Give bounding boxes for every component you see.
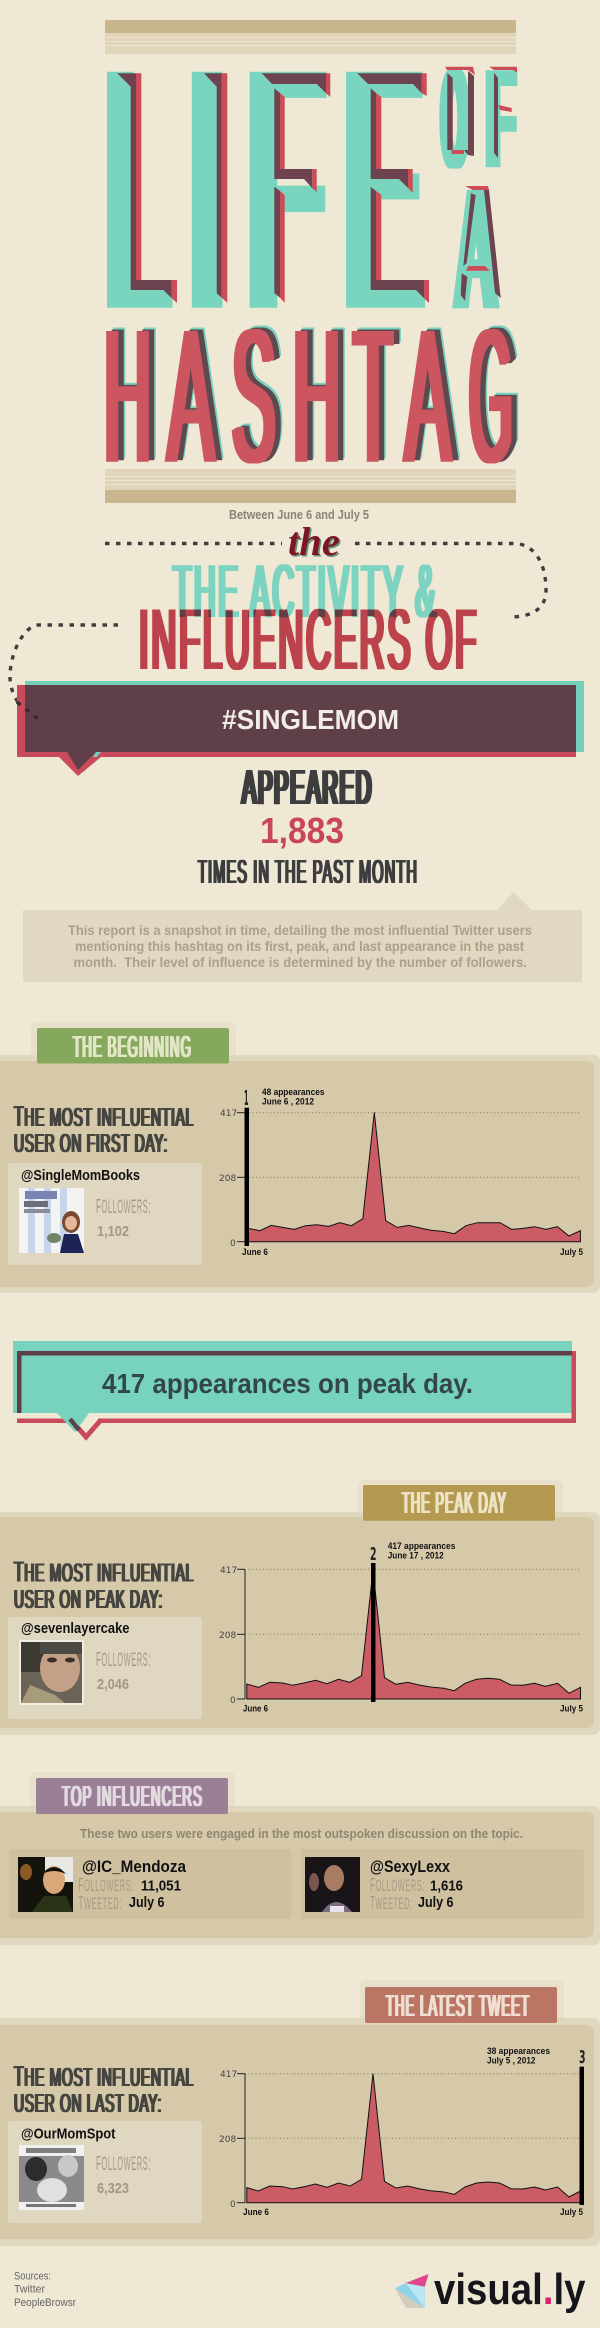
chart: first day marker: 417 xyxy=(220,1109,237,1119)
word: OF: O xyxy=(442,39,467,197)
chart: first day marker: July 5 xyxy=(560,1247,583,1257)
user card: 2,046 xyxy=(97,1676,129,1693)
word: HASHTAG: S xyxy=(232,291,275,503)
user card: @SingleMomBooks xyxy=(21,1167,140,1184)
user card: 6,323 xyxy=(97,2180,129,2197)
panel background xyxy=(0,1022,600,1293)
tab: top influencers: TOP INFLUENCERS xyxy=(62,1781,203,1813)
chart: last day marker: July 5 , 2012 xyxy=(487,2055,536,2065)
title: life of a hashtag xyxy=(104,0,517,503)
chart: first day marker: 48 appearances xyxy=(262,1087,324,1097)
heading: most influential user on peak day: THE MOST INFLUENTIAL xyxy=(14,1557,194,1589)
influencer card: IC_Mendoza: TWEETED: xyxy=(78,1892,122,1913)
heading: most influential user on peak day xyxy=(14,1557,194,1614)
sources: PeopleBrowsr xyxy=(14,2297,76,2309)
callout text: 417 appearances on peak day. xyxy=(102,1368,473,1399)
user card xyxy=(8,1617,202,1719)
chart: first day marker xyxy=(219,1086,583,1257)
user card: FOLLOWERS: xyxy=(96,1195,151,1218)
user card: @OurMomSpot xyxy=(21,2125,116,2142)
chart: last day marker: July 5 xyxy=(560,2207,583,2217)
intro paragraph: mentioning this hashtag on its first, peak, and last appearance in the past xyxy=(75,938,524,954)
avatar: book cover xyxy=(19,1188,84,1253)
callout: peak day appearances xyxy=(13,1341,576,1437)
influencer card: SexyLexx: @SexyLexx xyxy=(370,1857,450,1876)
chart: peak day marker: 2 xyxy=(370,1544,376,1565)
word: HASHTAG: A xyxy=(405,291,450,503)
heading: most influential user on peak day: USER ON PEAK DAY: xyxy=(14,1584,163,1614)
word: HASHTAG: T xyxy=(353,291,392,503)
avatar: our mom spot logo xyxy=(19,2145,84,2210)
word: LIFE: F xyxy=(248,0,324,381)
dashed connector line xyxy=(10,544,546,719)
section: the peak day xyxy=(0,1480,600,1735)
word: the: the xyxy=(288,519,340,564)
chart: peak day marker: 417 xyxy=(220,1566,237,1576)
chart: last day marker: 3 xyxy=(579,2047,586,2068)
user card: FOLLOWERS: xyxy=(96,2152,151,2175)
chart: first day marker: 0 xyxy=(230,1239,236,1249)
chart: peak day marker: July 5 xyxy=(560,1704,583,1714)
chart: first day marker: June 6 , 2012 xyxy=(262,1097,314,1107)
influencer card: SexyLexx: July 6 xyxy=(418,1895,454,1911)
user card: FOLLOWERS: xyxy=(96,1648,151,1671)
bottom stripe band xyxy=(105,469,516,503)
avatar: man photo xyxy=(18,1857,73,1912)
user card: 1,102 xyxy=(97,1223,129,1240)
chart: first day marker: June 6 xyxy=(242,1247,268,1257)
text: APPEARED xyxy=(242,760,373,815)
chart: last day marker: 208 xyxy=(219,2135,236,2145)
title: life of a hashtag: E xyxy=(344,0,422,381)
heading: most influential user on first day: USER ON FIRST DAY: xyxy=(14,1128,168,1158)
chart: last day marker xyxy=(219,2046,586,2217)
influencer card: IC_Mendoza: July 6 xyxy=(129,1895,164,1911)
chart: first day marker: 1 xyxy=(244,1086,248,1110)
panel background xyxy=(0,1480,600,1735)
intro paragraph xyxy=(68,922,532,970)
intro text panel xyxy=(23,892,582,982)
sources xyxy=(14,2270,76,2309)
word: HASHTAG: A xyxy=(167,291,214,503)
user card: @sevenlayercake xyxy=(21,1620,130,1637)
text: F xyxy=(487,39,515,197)
user card xyxy=(8,1163,202,1265)
heading: most influential user on first day: THE MOST INFLUENTIAL xyxy=(14,1101,194,1133)
tab: top influencers xyxy=(36,1778,228,1814)
hashtag label: #SINGLEMOM xyxy=(222,704,399,735)
chart: first day marker: 208 xyxy=(219,1174,236,1184)
total count: 1,883 xyxy=(260,810,344,851)
icon: visual.ly gem xyxy=(395,2274,429,2308)
chart: peak day marker: June 17 , 2012 xyxy=(388,1551,444,1561)
date range: Between June 6 and July 5 xyxy=(229,508,369,522)
heading: most influential user on first day xyxy=(14,1101,194,1158)
intro paragraph: month. Their level of influence is determined by the number of followers. xyxy=(74,954,527,970)
logo: visual.ly: visual.ly xyxy=(434,2265,586,2314)
influencer card: IC_Mendoza: @IC_Mendoza xyxy=(82,1857,186,1876)
chart: last day marker: 0 xyxy=(230,2200,236,2210)
chart: peak day marker xyxy=(219,1541,583,1714)
influencer card: SexyLexx: TWEETED: xyxy=(370,1892,412,1913)
influencer card: IC_Mendoza xyxy=(10,1849,292,1919)
hashtag banner xyxy=(17,681,584,776)
tab: the beginning xyxy=(37,1028,229,1064)
tab: the peak day xyxy=(363,1485,555,1521)
description: These two users were engaged in the most outspoken discussion on the topic. xyxy=(80,1827,523,1841)
title: life of a hashtag: A xyxy=(455,153,497,345)
section: top influencers xyxy=(0,1772,600,1945)
chart: peak day marker: June 6 xyxy=(243,1704,268,1714)
tab: the latest tweet xyxy=(365,1987,557,2023)
sources: Sources: xyxy=(14,2270,51,2282)
section: the beginning xyxy=(0,1022,600,1293)
chart: last day marker: 417 xyxy=(220,2070,237,2080)
word: LIFE xyxy=(106,0,429,381)
word: A xyxy=(455,153,501,345)
heading: most influential user on last day: THE MOST INFLUENTIAL xyxy=(14,2061,194,2093)
word: HASHTAG: H xyxy=(104,291,151,503)
avatar: woman photo xyxy=(305,1857,360,1912)
chart: peak day marker: 417 appearances xyxy=(388,1541,455,1551)
influencer card: SexyLexx xyxy=(301,1849,584,1919)
word: LIFE: L xyxy=(106,0,168,381)
chart: last day marker: June 6 xyxy=(243,2207,269,2217)
sources: Twitter xyxy=(14,2284,45,2296)
user card xyxy=(8,2121,202,2223)
influencer card: SexyLexx: 1,616 xyxy=(430,1879,463,1895)
intro paragraph: This report is a snapshot in time, detailing the most influential Twitter users xyxy=(68,922,532,938)
chart: last day marker: 38 appearances xyxy=(487,2046,550,2056)
word: HASHTAG: H xyxy=(293,291,340,503)
tab: the beginning: THE BEGINNING xyxy=(73,1030,192,1064)
influencer card: IC_Mendoza: FOLLOWERS: xyxy=(78,1874,134,1895)
heading: most influential user on last day xyxy=(14,2061,194,2118)
influencer card: IC_Mendoza: 11,051 xyxy=(141,1879,181,1895)
avatar: woman photo xyxy=(19,1640,84,1705)
top stripe band xyxy=(105,20,516,54)
heading: most influential user on last day: USER ON LAST DAY: xyxy=(14,2088,162,2118)
word: OF xyxy=(442,39,517,197)
chart: peak day marker: 208 xyxy=(219,1631,236,1641)
panel background xyxy=(0,1980,600,2246)
section: the latest tweet xyxy=(0,1980,600,2246)
chart: peak day marker: 0 xyxy=(230,1696,236,1706)
word: LIFE: I xyxy=(185,0,229,381)
influencer card: SexyLexx: FOLLOWERS: xyxy=(370,1874,425,1895)
panel background xyxy=(0,1772,600,1945)
